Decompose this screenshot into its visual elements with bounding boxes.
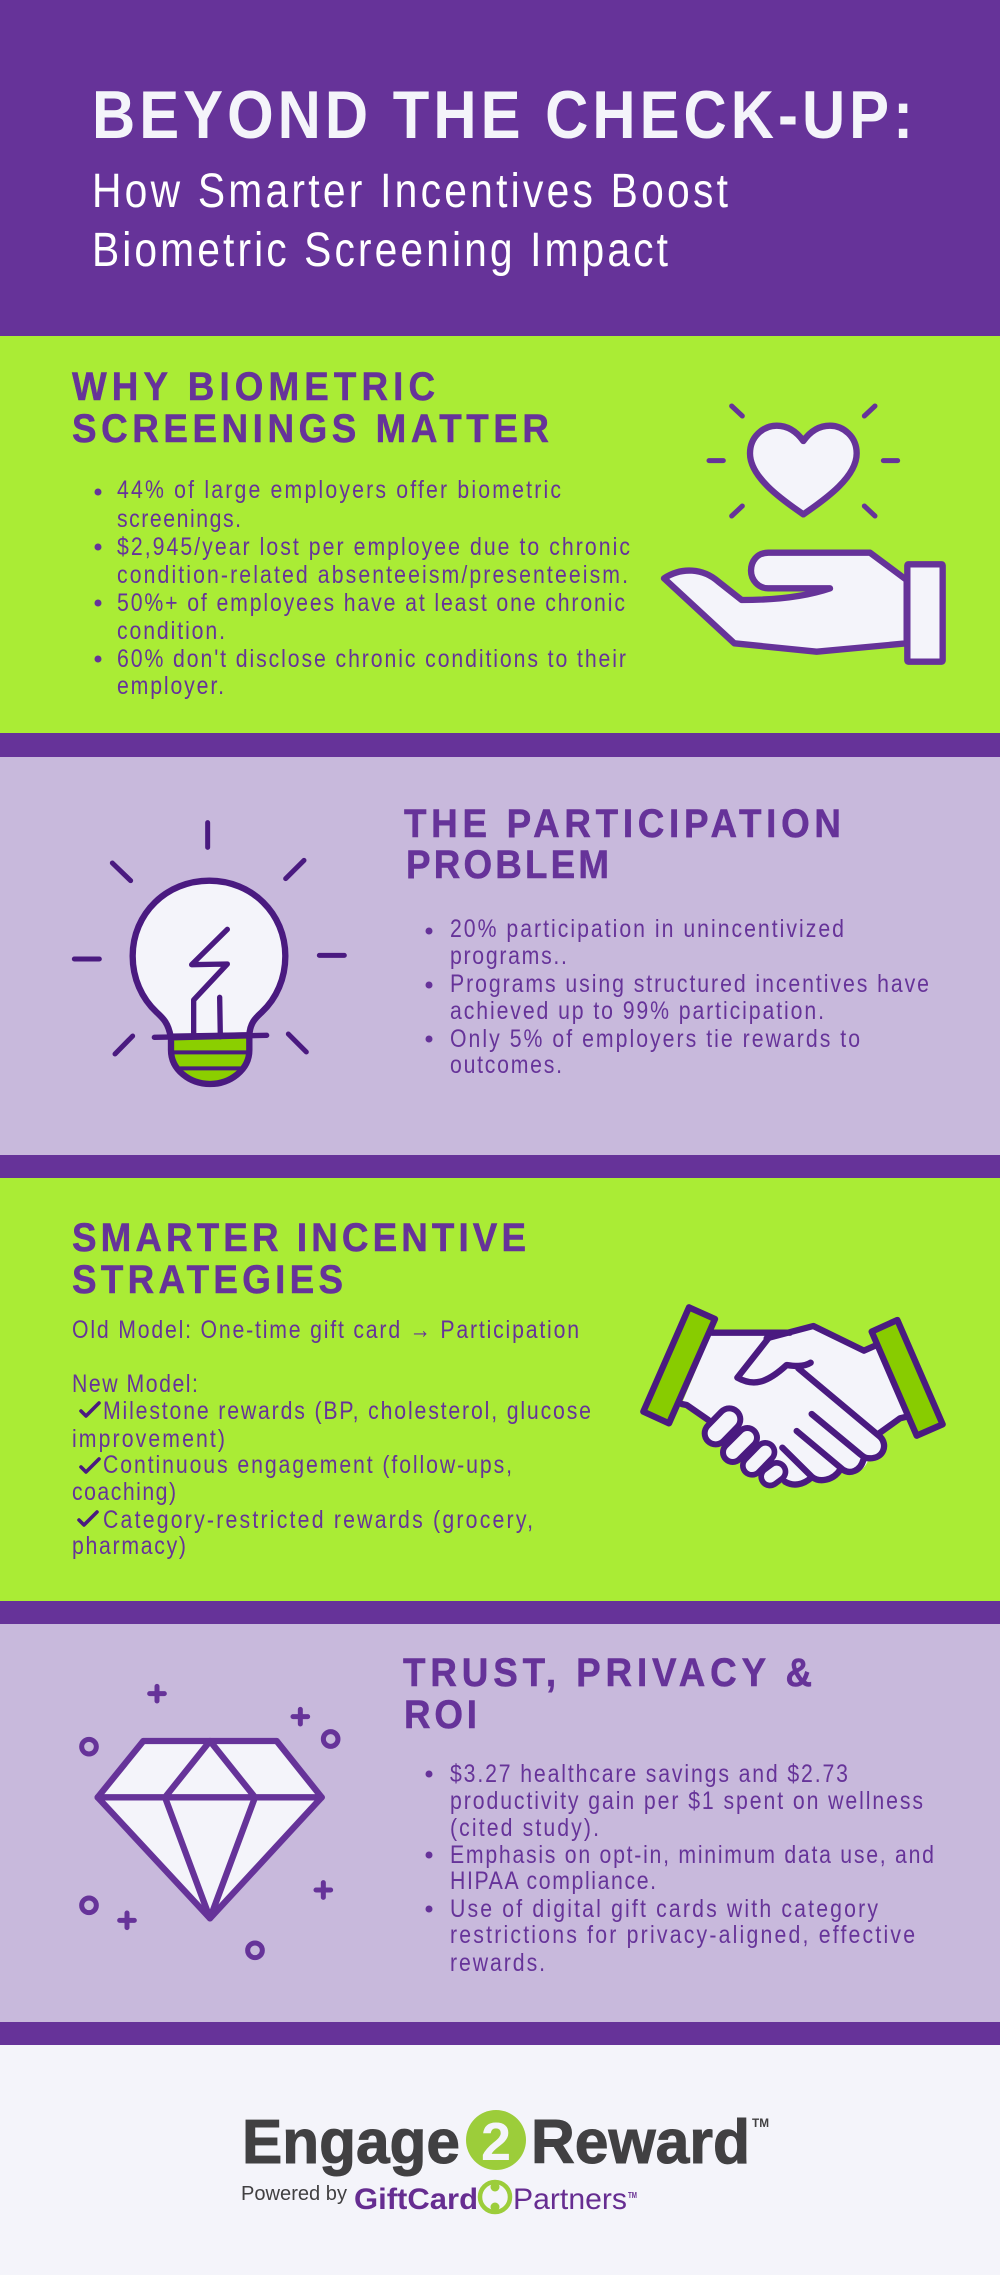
heading: the participation problem (404, 802, 841, 887)
heading: why biometric screenings matter: WHY BIOMETRIC (72, 365, 435, 409)
text: new model list: New Model: (72, 1369, 198, 1397)
bullet list: screening statistics: 50%+ of employees have at least one chronic (117, 588, 625, 616)
bullet list: ROI and privacy points: productivity gain per $1 spent on wellness (450, 1786, 923, 1814)
heading: trust, privacy and ROI: ROI (404, 1693, 477, 1737)
bullet list: participation statistics (426, 914, 929, 1078)
logo: powered by GiftCard Partners: Partners (513, 2183, 627, 2216)
heading: the participation problem: THE PARTICIPATION (404, 802, 841, 846)
title: BEYOND THE CHECK-UP: (92, 76, 913, 153)
text: old model: Old Model: One-time gift card → Participation (72, 1315, 579, 1343)
logo: powered by GiftCard Partners: Powered by (241, 2183, 347, 2205)
divider bar (0, 733, 1000, 757)
text: new model list: Continuous engagement (follow-ups, (103, 1450, 512, 1478)
logo: Engage2Reward: 2 (481, 2112, 511, 2172)
logo: powered by GiftCard Partners: GiftCard (354, 2183, 478, 2216)
bullet list: screening statistics: condition. (117, 616, 225, 644)
bullet list: screening statistics: condition-related absenteeism/presenteeism. (117, 560, 628, 588)
panel: why biometric screenings matter (0, 336, 1000, 733)
bullet list: ROI and privacy points: $3.27 healthcare savings and $2.73 (450, 1759, 848, 1787)
subtitle: Biometric Screening Impact (92, 224, 669, 277)
heading: smarter incentive strategies: STRATEGIES (72, 1258, 343, 1302)
logo: powered by GiftCard Partners (241, 2182, 637, 2216)
text: new model list: Category-restricted rewards (grocery, (103, 1505, 533, 1533)
panel: the participation problem (0, 757, 1000, 1155)
panel: trust, privacy and ROI (0, 1624, 1000, 2022)
bullet list: ROI and privacy points: (cited study). (450, 1813, 599, 1841)
panel: smarter incentive strategies (0, 1178, 1000, 1601)
logo: Engage2Reward: Engage (242, 2108, 460, 2177)
subtitle: How Smarter Incentives Boost (92, 165, 729, 218)
text: new model list: coaching) (72, 1477, 176, 1505)
icon: hand holding heart (664, 406, 943, 662)
bullet list: screening statistics: 60% don't disclose chronic conditions to their (117, 644, 626, 672)
bullet list: screening statistics: $2,945/year lost per employee due to chronic (117, 532, 630, 560)
divider bar (0, 2022, 1000, 2045)
text: new model list: Milestone rewards (BP, cholesterol, glucose (103, 1396, 591, 1424)
icon: handshake (643, 1307, 943, 1485)
heading: trust, privacy and ROI: TRUST, PRIVACY & (403, 1651, 812, 1695)
bullet list: participation statistics: 20% participation in unincentivized (450, 914, 844, 942)
text: new model list: pharmacy) (72, 1531, 186, 1559)
divider bar (0, 1601, 1000, 1624)
icon: diamond (82, 1686, 338, 1958)
heading: why biometric screenings matter: SCREENINGS MATTER (72, 407, 549, 451)
heading: why biometric screenings matter (72, 365, 549, 451)
bullet list: ROI and privacy points: Emphasis on opt-in, minimum data use, and (450, 1840, 934, 1868)
panel: header (0, 0, 1000, 336)
heading: the participation problem: PROBLEM (406, 843, 609, 887)
logo: Engage2Reward (241, 2108, 769, 2216)
bullet list: participation statistics: outcomes. (450, 1050, 562, 1078)
heading: smarter incentive strategies: SMARTER INCENTIVE (72, 1216, 526, 1260)
bullet list: ROI and privacy points: rewards. (450, 1948, 545, 1976)
divider bar (0, 1155, 1000, 1178)
bullet list: participation statistics: programs.. (450, 941, 567, 969)
logo: Engage2Reward: TM (752, 2116, 769, 2130)
bullet list: participation statistics: Programs using structured incentives have (450, 969, 929, 997)
icon: light bulb (74, 823, 344, 1084)
logo: powered by GiftCard Partners: TM (628, 2191, 637, 2200)
bullet list: ROI and privacy points: Use of digital gift cards with category (450, 1894, 878, 1922)
bullet list: ROI and privacy points (426, 1759, 934, 1976)
text: new model list: improvement) (72, 1424, 225, 1452)
bullet list: participation statistics: achieved up to 99% participation. (450, 996, 824, 1024)
heading: trust, privacy and ROI (403, 1651, 812, 1737)
bullet list: participation statistics: Only 5% of employers tie rewards to (450, 1024, 860, 1052)
bullet list: ROI and privacy points: restrictions for privacy-aligned, effective (450, 1920, 915, 1948)
bullet list: screening statistics: 44% of large employers offer biometric (117, 475, 561, 503)
logo: Engage2Reward: Reward (531, 2108, 750, 2177)
bullet list: screening statistics: employer. (117, 671, 224, 699)
subtitle (92, 165, 729, 277)
text: new model list (72, 1369, 591, 1559)
bullet list: screening statistics (94, 475, 630, 699)
bullet list: screening statistics: screenings. (117, 504, 241, 532)
heading: smarter incentive strategies (72, 1216, 526, 1302)
icon: check marks (79, 1403, 99, 1525)
bullet list: ROI and privacy points: HIPAA compliance. (450, 1866, 656, 1894)
